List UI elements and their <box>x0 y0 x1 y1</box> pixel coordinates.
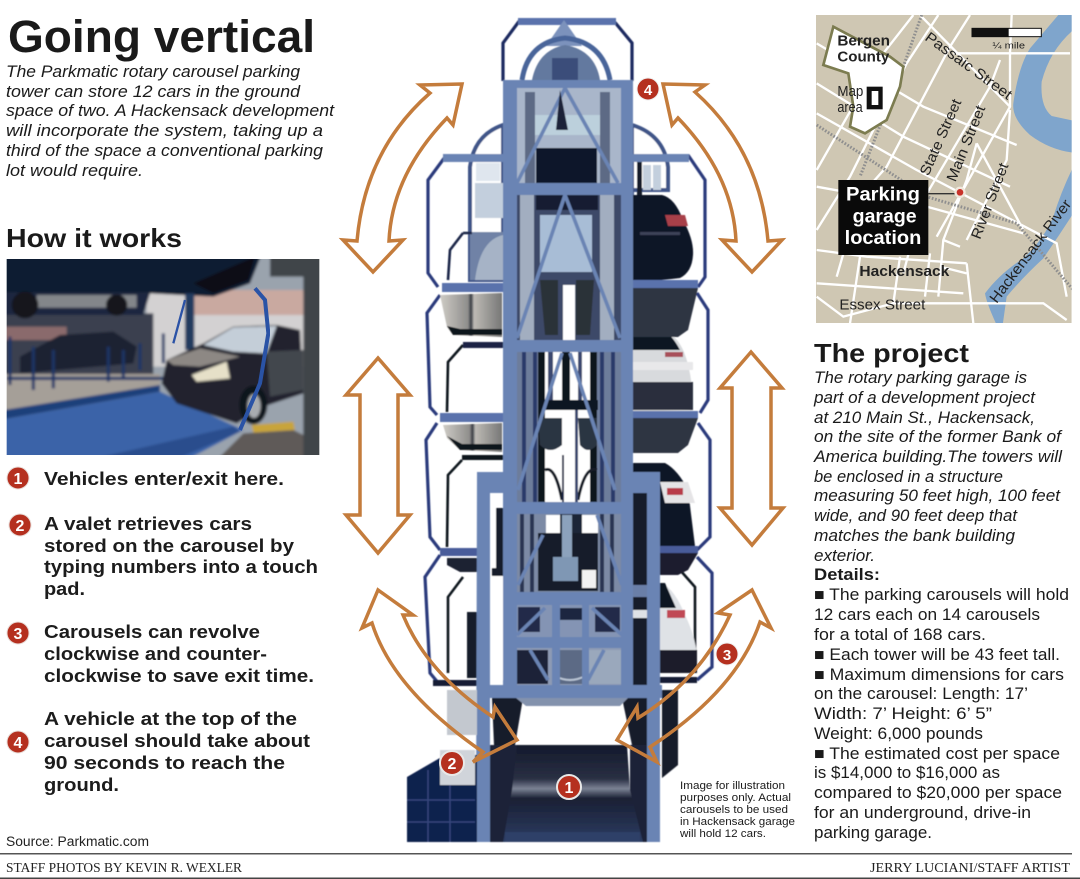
badge 1 <box>557 775 581 799</box>
locator map <box>816 15 1075 325</box>
bay 6 <box>515 648 623 688</box>
step 3 <box>7 621 314 686</box>
county inset: Bergen <box>837 34 890 50</box>
project details: compared to $20,000 per space <box>814 784 1062 802</box>
step 4: ground. <box>44 774 119 795</box>
source line: Source: Parkmatic.com <box>6 834 149 849</box>
tower interior <box>515 88 623 688</box>
heading: how it works: How it works <box>6 223 182 253</box>
project description: be enclosed in a structure <box>814 468 1003 486</box>
project details: ■ The parking carousels will hold <box>814 586 1069 604</box>
project details: Details: <box>814 566 880 584</box>
callout: parking garage location <box>838 180 928 255</box>
project description: matches the bank building <box>814 527 1016 545</box>
bay 1 <box>515 88 623 183</box>
curved arrow: top right <box>663 84 782 272</box>
main columns and beams <box>476 80 662 842</box>
badge 2: 2 <box>448 756 457 773</box>
trays <box>433 154 698 686</box>
street labels: Hackensack River <box>987 197 1075 306</box>
scale bar: ¼ mile <box>992 40 1025 50</box>
large dome behind tower <box>470 125 668 280</box>
step 3: clockwise to save exit time. <box>44 665 314 686</box>
step 4: 4 <box>14 735 23 752</box>
step 4: A vehicle at the top of the <box>44 708 297 729</box>
photo credit: STAFF PHOTOS BY KEVIN R. WEXLER <box>6 861 243 876</box>
river: upper branch <box>1013 15 1073 153</box>
project details: ■ Each tower will be 43 feet tall. <box>814 646 1060 664</box>
car level 1 <box>632 195 693 281</box>
garage marker <box>928 187 966 198</box>
carousel frames left <box>425 157 472 685</box>
project details: Weight: 6,000 pounds <box>814 725 983 743</box>
badge 3: 3 <box>723 647 731 664</box>
tower illustration <box>407 18 712 842</box>
bay 2 <box>515 195 623 340</box>
car level 3 <box>633 463 695 548</box>
callout: parking garage location: location <box>845 228 921 249</box>
illustration note: will hold 12 cars. <box>679 828 766 840</box>
carousel frames right <box>680 155 712 680</box>
step 3: clockwise and counter- <box>44 643 267 664</box>
street labels <box>839 30 1075 313</box>
street labels: State Street <box>917 97 965 178</box>
artist credit: JERRY LUCIANI/STAFF ARTIST <box>870 861 1070 876</box>
project description: part of a development project <box>813 389 1036 407</box>
intro text block: third of the space a conventional parking <box>6 142 324 160</box>
top frame of tower <box>503 18 632 81</box>
step 3: Carousels can revolve <box>44 621 260 642</box>
intro text block: tower can store 12 cars in the ground <box>6 83 301 101</box>
illustration note <box>679 780 795 840</box>
intro text block: The Parkmatic rotary carousel parking <box>6 63 301 81</box>
step 1: Vehicles enter/exit here. <box>44 468 284 489</box>
step 2: 2 <box>16 518 25 535</box>
badge 4 <box>637 78 659 100</box>
county inset: Map <box>837 84 863 100</box>
project details: 12 cars each on 14 carousels <box>814 606 1040 624</box>
project description: exterior. <box>814 547 875 565</box>
car level 4 <box>635 583 697 673</box>
street grid <box>817 15 1070 323</box>
step 2 <box>9 513 318 599</box>
project details: on the carousel: Length: 17’ <box>814 685 1028 703</box>
bay 3 <box>515 352 623 502</box>
project description: America building.The towers will <box>813 448 1063 466</box>
vertical arrow: right <box>720 352 783 545</box>
step 1: 1 <box>14 471 23 488</box>
street labels: Main Street <box>944 103 989 184</box>
badge 1: 1 <box>565 780 574 797</box>
step 2: stored on the carousel by <box>44 535 295 556</box>
river: Hackensack River <box>985 167 1073 325</box>
step 2: typing numbers into a touch <box>44 556 318 577</box>
dark space between columns <box>467 472 648 687</box>
intro text block <box>6 63 336 180</box>
callout: parking garage location: Parking <box>846 185 920 206</box>
step list <box>7 467 318 795</box>
project description: wide, and 90 feet deep that <box>814 507 1018 525</box>
illustration note: carousels to be used <box>680 804 788 816</box>
step 2: A valet retrieves cars <box>44 513 252 534</box>
badge 3 <box>716 643 738 665</box>
scale bar <box>972 28 1041 50</box>
step 2: pad. <box>44 578 85 599</box>
project details <box>814 566 1069 842</box>
step 3: 3 <box>14 626 23 643</box>
project description: at 210 Main St., Hackensack, <box>814 409 1035 427</box>
intro text block: space of two. A Hackensack development <box>6 102 336 120</box>
street labels: Passaic Street <box>922 30 1015 103</box>
project details: is $14,000 to $16,000 as <box>814 764 1000 782</box>
project details: for a total of 168 cars. <box>814 626 986 644</box>
curved arrow: top left <box>343 84 462 272</box>
illustration note: purposes only. Actual <box>680 792 791 804</box>
county inset: County <box>837 49 890 65</box>
lower dark legs and pit <box>490 690 678 842</box>
county inset: area <box>837 100 863 116</box>
car level 2 <box>633 332 693 412</box>
project details: ■ The estimated cost per space <box>814 745 1060 763</box>
bay 4 <box>515 513 623 593</box>
callout: parking garage location: garage <box>853 207 917 228</box>
bay 5 <box>515 605 623 640</box>
project description: measuring 50 feet high, 100 feet <box>814 487 1061 505</box>
county inset <box>823 27 903 133</box>
curved arrow: bottom right <box>617 590 771 762</box>
badge 4: 4 <box>644 82 653 99</box>
badge 2 <box>440 751 464 775</box>
project details: ■ Maximum dimensions for cars <box>814 666 1064 684</box>
heading: the project: The project <box>814 338 969 368</box>
project details: parking garage. <box>814 824 932 842</box>
title: Going vertical <box>8 11 315 62</box>
step 4: carousel should take about <box>44 730 310 751</box>
vertical arrow: left <box>346 358 410 553</box>
curved arrow: bottom left <box>362 590 517 762</box>
project description <box>813 369 1064 565</box>
illustration note: Image for illustration <box>680 780 785 792</box>
project details: for an underground, drive-in <box>814 804 1031 822</box>
intro text block: will incorporate the system, taking up a <box>6 122 323 140</box>
rail lines <box>817 15 1073 290</box>
step 4 <box>7 708 310 795</box>
project description: on the site of the former Bank of <box>814 428 1064 446</box>
illustration note: in Hackensack garage <box>680 816 795 828</box>
project details: Width: 7’ Height: 6’ 5” <box>814 705 992 723</box>
street labels: River Street <box>969 161 1012 241</box>
street labels: Hackensack <box>859 264 950 280</box>
braces <box>517 88 622 680</box>
equipment crate <box>407 690 477 842</box>
step 4: 90 seconds to reach the <box>44 752 285 773</box>
street labels: Essex Street <box>839 297 925 313</box>
intro text block: lot would require. <box>6 162 143 180</box>
photo: car entering carousel <box>6 259 320 455</box>
project description: The rotary parking garage is <box>814 369 1027 387</box>
parked cars right <box>632 195 697 673</box>
